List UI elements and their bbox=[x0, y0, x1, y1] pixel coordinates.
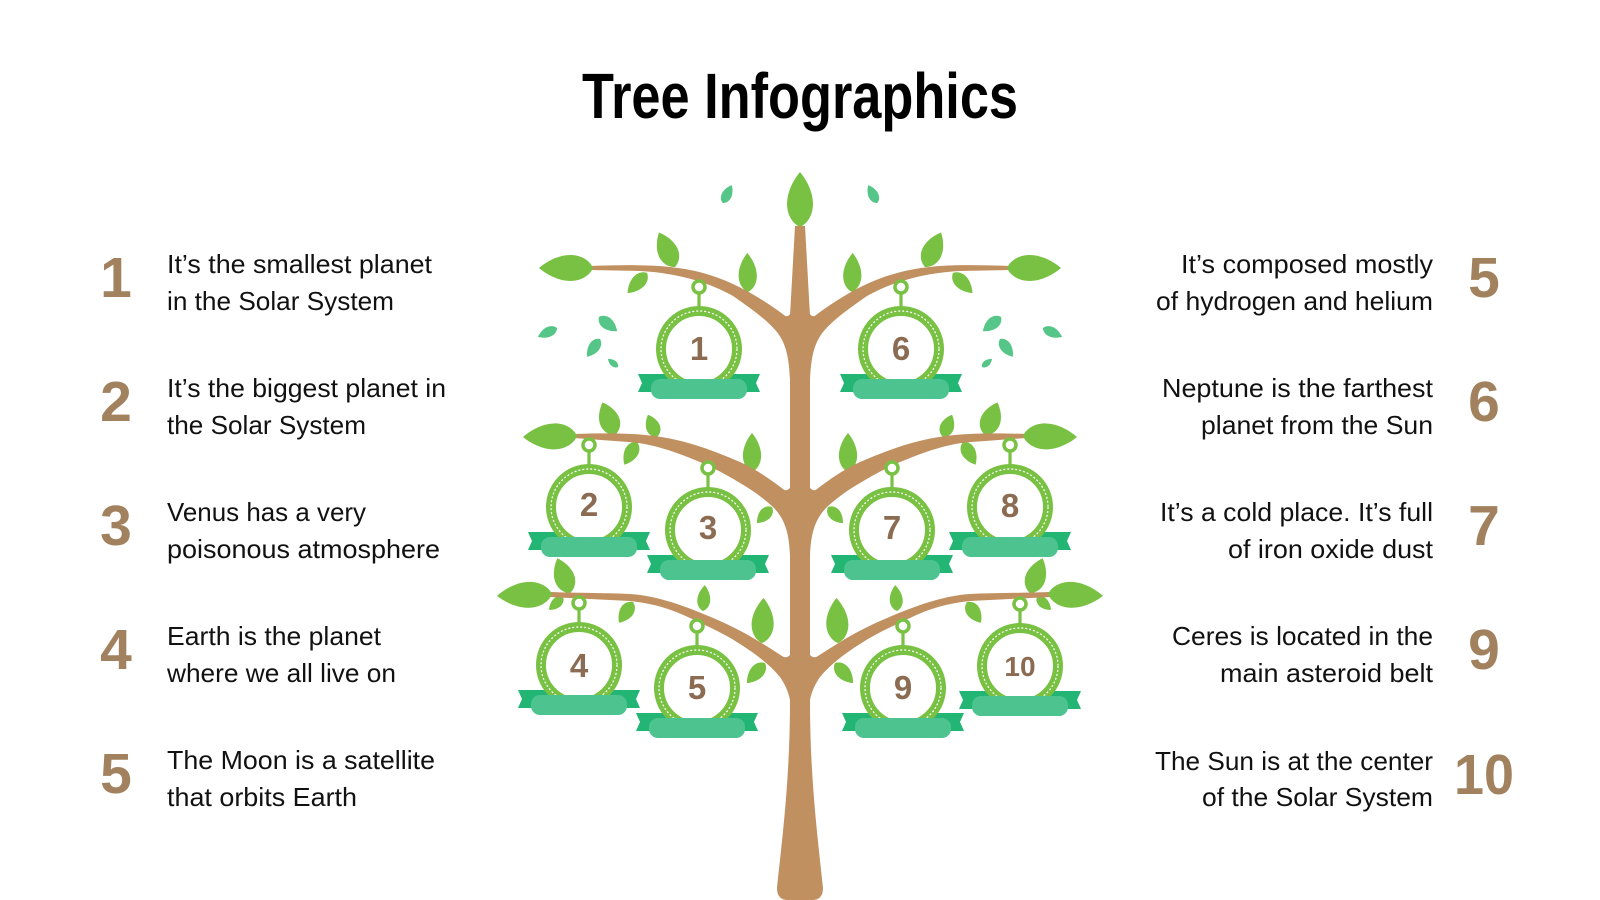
medallion 10 bbox=[959, 598, 1081, 716]
left item 2 bbox=[100, 370, 446, 440]
right item 10: The Sun is at the center bbox=[1155, 746, 1433, 776]
medallion 6 bbox=[840, 281, 962, 399]
medallion 4 bbox=[518, 597, 640, 715]
left item 4 bbox=[100, 618, 396, 688]
left item 5: 5 bbox=[100, 742, 132, 806]
medallion 5 bbox=[636, 620, 758, 738]
right item 6: Neptune is the farthest bbox=[1162, 373, 1434, 403]
right item 5: 5 bbox=[1468, 246, 1500, 310]
left item 2: It’s the biggest planet in bbox=[167, 373, 446, 403]
medallion 7: 7 bbox=[883, 509, 901, 546]
medallion 10: 10 bbox=[1004, 651, 1036, 682]
medallion 3: 3 bbox=[699, 509, 717, 546]
right item 10 bbox=[1155, 743, 1514, 812]
right item 10: 10 bbox=[1454, 743, 1514, 807]
medallion 5: 5 bbox=[688, 669, 706, 706]
medallion 7 bbox=[831, 462, 953, 580]
left item 1 bbox=[100, 246, 433, 316]
right item 6: planet from the Sun bbox=[1201, 410, 1433, 440]
medallion 2: 2 bbox=[580, 486, 598, 523]
right item 9: 9 bbox=[1468, 618, 1500, 682]
right item 7: It’s a cold place. It’s full bbox=[1160, 497, 1433, 527]
right item 5: of hydrogen and helium bbox=[1156, 286, 1433, 316]
right item 5: It’s composed mostly bbox=[1181, 249, 1433, 279]
medallion 6: 6 bbox=[892, 330, 910, 367]
medallion 9: 9 bbox=[894, 669, 912, 706]
left item 3: Venus has a very bbox=[167, 497, 366, 527]
medallion 3 bbox=[647, 462, 769, 580]
right item 5 bbox=[1156, 246, 1500, 316]
trunk bbox=[777, 226, 823, 900]
title: Tree Infographics bbox=[582, 60, 1018, 132]
medallion 1: 1 bbox=[690, 330, 708, 367]
left branches and leaves bbox=[497, 183, 800, 710]
left item 5: that orbits Earth bbox=[167, 782, 357, 812]
left item 5 bbox=[100, 742, 435, 812]
left item 1: in the Solar System bbox=[167, 286, 394, 316]
right item 10: of the Solar System bbox=[1202, 782, 1433, 812]
left item 3: 3 bbox=[100, 494, 132, 558]
right item 7: of iron oxide dust bbox=[1228, 534, 1434, 564]
right item 7 bbox=[1160, 494, 1500, 564]
medallion 4: 4 bbox=[570, 647, 589, 684]
left item 2: 2 bbox=[100, 370, 132, 434]
right branches and leaves bbox=[800, 183, 1103, 710]
left item 3 bbox=[100, 494, 440, 564]
left item 1: It’s the smallest planet bbox=[167, 249, 433, 279]
right item 9 bbox=[1172, 618, 1500, 688]
right item 9: Ceres is located in the bbox=[1172, 621, 1433, 651]
left item 1: 1 bbox=[100, 246, 132, 310]
right item 6: 6 bbox=[1468, 370, 1500, 434]
left item 2: the Solar System bbox=[167, 410, 366, 440]
left item 4: 4 bbox=[100, 618, 132, 682]
top leaf bbox=[787, 172, 813, 227]
medallion 8 bbox=[949, 439, 1071, 557]
left item 4: where we all live on bbox=[166, 658, 396, 688]
right item 9: main asteroid belt bbox=[1220, 658, 1434, 688]
medallion 8: 8 bbox=[1001, 487, 1019, 524]
medallion 2 bbox=[528, 439, 650, 557]
medallion 1 bbox=[638, 281, 760, 399]
right item 6 bbox=[1162, 370, 1500, 440]
medallion 9 bbox=[842, 620, 964, 738]
left item 4: Earth is the planet bbox=[167, 621, 382, 651]
tree illustration bbox=[497, 172, 1103, 900]
left item 3: poisonous atmosphere bbox=[167, 534, 440, 564]
right item 7: 7 bbox=[1468, 494, 1500, 558]
left item 5: The Moon is a satellite bbox=[167, 745, 435, 775]
